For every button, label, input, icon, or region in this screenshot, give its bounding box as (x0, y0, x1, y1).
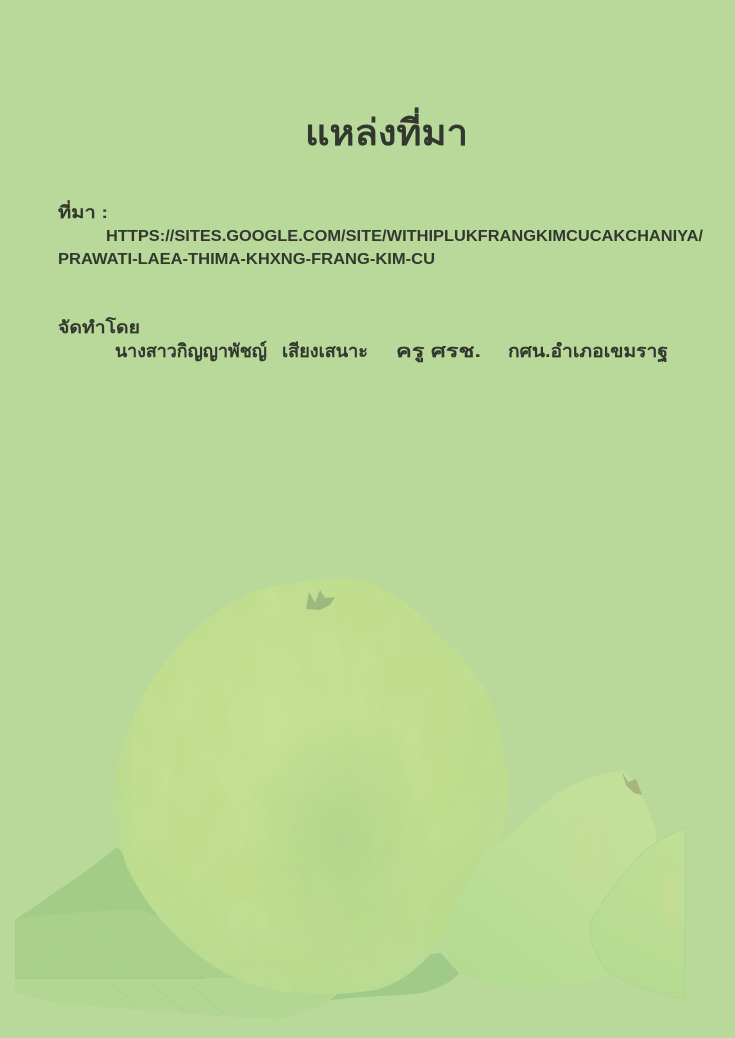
flesh highlight (566, 808, 610, 892)
illustration: guava with leaf and slices (15, 570, 685, 1019)
credits text: เสียงเสนาะ (282, 341, 368, 361)
front slice (445, 808, 630, 988)
credits text: กศน.อำเภอเขมราฐ (508, 341, 668, 363)
guava body (105, 570, 520, 1005)
source url: HTTPS://SITES.GOOGLE.COM/SITE/WITHIPLUKFRANGKIMCUCAKCHANIYA/ (106, 228, 704, 245)
source label: ที่มา : (58, 200, 108, 222)
source url: PRAWATI-LAEA-THIMA-KHXNG-FRANG-KIM-CU (58, 251, 435, 268)
heading: แหล่งที่มา (305, 107, 468, 153)
leaf (15, 847, 459, 1019)
flesh highlight right (668, 892, 676, 914)
credits text: นางสาวกิญญาพัชญ์ (115, 340, 267, 362)
guava stem (306, 590, 335, 610)
back slice (487, 770, 657, 930)
credits text: ครู ศรช. (396, 341, 481, 363)
source url (58, 228, 704, 268)
right slice (590, 828, 685, 1000)
stem on slice (622, 772, 642, 795)
credits label: จัดทำโดย (58, 317, 140, 337)
credits text (115, 340, 668, 363)
